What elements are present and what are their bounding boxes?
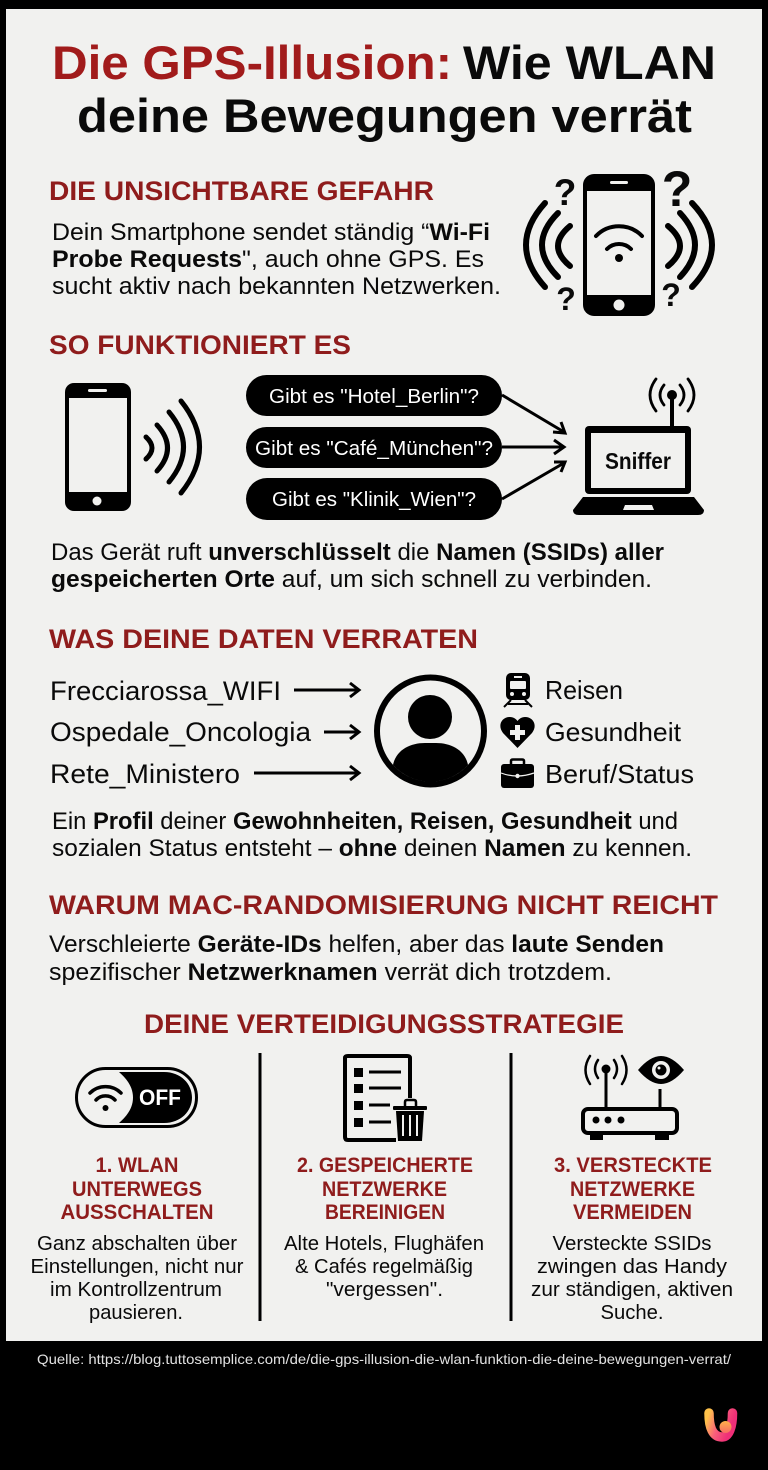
text: strategy 1: Ganz abschalten über [37, 1233, 237, 1255]
title: deine Bewegungen verrät [77, 89, 692, 142]
text block: intro [52, 219, 501, 300]
probe request pills: Gibt es "Hotel_Berlin"? [269, 385, 479, 408]
icon: phone searching wifi: ? [554, 172, 576, 213]
title [52, 36, 716, 142]
text block: how it works: gespeicherten Orte auf, um sich schnell zu verbinden. [51, 566, 652, 593]
arrows to profile [254, 683, 359, 780]
panel: strategy 3 [531, 1056, 733, 1324]
text: strategy 1 [30, 1154, 244, 1324]
text block: MAC randomisierung [49, 931, 664, 986]
text: strategy 2: "vergessen". [326, 1279, 443, 1301]
icon: wifi off toggle [76, 1068, 196, 1126]
text block: profile [52, 808, 692, 862]
text: strategy 3: zwingen das Handy [537, 1256, 727, 1278]
text: strategy 3: VERMEIDEN [573, 1201, 692, 1224]
probe request pills: Gibt es "Café_München"? [255, 437, 493, 460]
logo [709, 1413, 732, 1437]
text: strategy 2: NETZWERKE [322, 1178, 447, 1201]
text: strategy 3: zur ständigen, aktiven [531, 1279, 733, 1301]
text block: intro: sucht aktiv nach bekannten Netzwerken. [52, 273, 501, 300]
text: strategy 3: NETZWERKE [570, 1178, 695, 1201]
text: strategy 2: 2. GESPEICHERTE [297, 1154, 473, 1177]
text: strategy 3: Versteckte SSIDs [552, 1233, 712, 1255]
text block: MAC randomisierung: Verschleierte Geräte-IDs helfen, aber das laute Senden [49, 931, 664, 958]
text block: MAC randomisierung: spezifischer Netzwerknamen verrät dich trotzdem. [49, 959, 612, 986]
title: Wie WLAN [463, 36, 716, 89]
category labels: Gesundheit [545, 717, 682, 747]
text block: how it works [51, 539, 664, 593]
text block: intro: Probe Requests ", auch ohne GPS. Es [52, 246, 484, 273]
icon: sniffer laptop: Sniffer [605, 448, 671, 474]
text: strategy 2: Alte Hotels, Flughäfen [284, 1233, 484, 1255]
icon: router with eye [583, 1056, 684, 1140]
text block: profile: sozialen Status entsteht – ohne deinen Namen zu kennen. [52, 835, 692, 862]
text: strategy 2: & Cafés regelmäßig [295, 1256, 473, 1278]
network name list: Ospedale_Oncologia [50, 717, 312, 747]
text: strategy 1: UNTERWEGS [72, 1178, 202, 1201]
text: strategy 1: im Kontrollzentrum [50, 1279, 222, 1301]
panel: strategy 2 [284, 1056, 484, 1301]
network name list: Frecciarossa_WIFI [50, 676, 281, 706]
network name list: Rete_Ministero [50, 759, 240, 789]
heading: was deine Daten verraten: WAS DEINE DATEN VERRATEN [49, 624, 478, 654]
text: strategy 1: 1. WLAN [96, 1154, 178, 1177]
icon: profile [377, 678, 484, 784]
text: strategy 1: pausieren. [89, 1302, 183, 1324]
source line: Quelle: https://blog.tuttosemplice.com/de/die-gps-illusion-die-wlan-funktion-die-deine-bewegungen-verrat/ [37, 1351, 731, 1367]
probe request pills [246, 375, 502, 520]
text: strategy 3: 3. VERSTECKTE [554, 1154, 712, 1177]
text: strategy 2: BEREINIGEN [325, 1201, 445, 1224]
icon: sniffer laptop [573, 379, 704, 515]
icon: wifi off toggle: OFF [139, 1085, 181, 1110]
heading: MAC randomisierung: WARUM MAC-RANDOMISIERUNG NICHT REICHT [49, 890, 719, 920]
text: strategy 1: Einstellungen, nicht nur [30, 1256, 244, 1278]
heading: so funktioniert es: SO FUNKTIONIERT ES [49, 330, 351, 360]
probe request pills: Gibt es "Klinik_Wien"? [272, 488, 476, 511]
heading: die unsichtbare Gefahr: DIE UNSICHTBARE GEFAHR [49, 176, 434, 206]
arrows to sniffer [502, 395, 565, 499]
network name list [50, 676, 312, 789]
icon: phone searching wifi: ? [662, 161, 692, 217]
icon: phone searching wifi [526, 161, 712, 317]
category labels: Reisen [545, 675, 623, 705]
text block: how it works: Das Gerät ruft unverschlüsselt die Namen (SSIDs) aller [51, 539, 664, 566]
icon: briefcase [501, 760, 534, 788]
icon: list and trash [345, 1056, 427, 1141]
text: strategy 3 [531, 1154, 733, 1324]
panel: strategy 1 [30, 1068, 244, 1324]
text: strategy 3: Suche. [600, 1302, 664, 1324]
text block: intro: Dein Smartphone sendet ständig “ Wi-Fi [52, 219, 490, 246]
icon: train [504, 673, 532, 707]
icon: phone sending signal [65, 383, 200, 511]
icon: phone searching wifi: ? [661, 277, 681, 313]
icon: heart [500, 717, 535, 748]
category labels: Beruf/Status [545, 759, 694, 789]
icon: phone searching wifi: ? [556, 281, 576, 317]
heading: verteidigungsstrategie: DEINE VERTEIDIGUNGSSTRATEGIE [144, 1009, 624, 1039]
text: strategy 2 [284, 1154, 484, 1301]
text: strategy 1: AUSSCHALTEN [60, 1201, 214, 1224]
category labels [545, 675, 694, 789]
title: Die GPS-Illusion: [52, 36, 452, 89]
text block: profile: Ein Profil deiner Gewohnheiten, Reisen, Gesundheit und [52, 808, 678, 835]
